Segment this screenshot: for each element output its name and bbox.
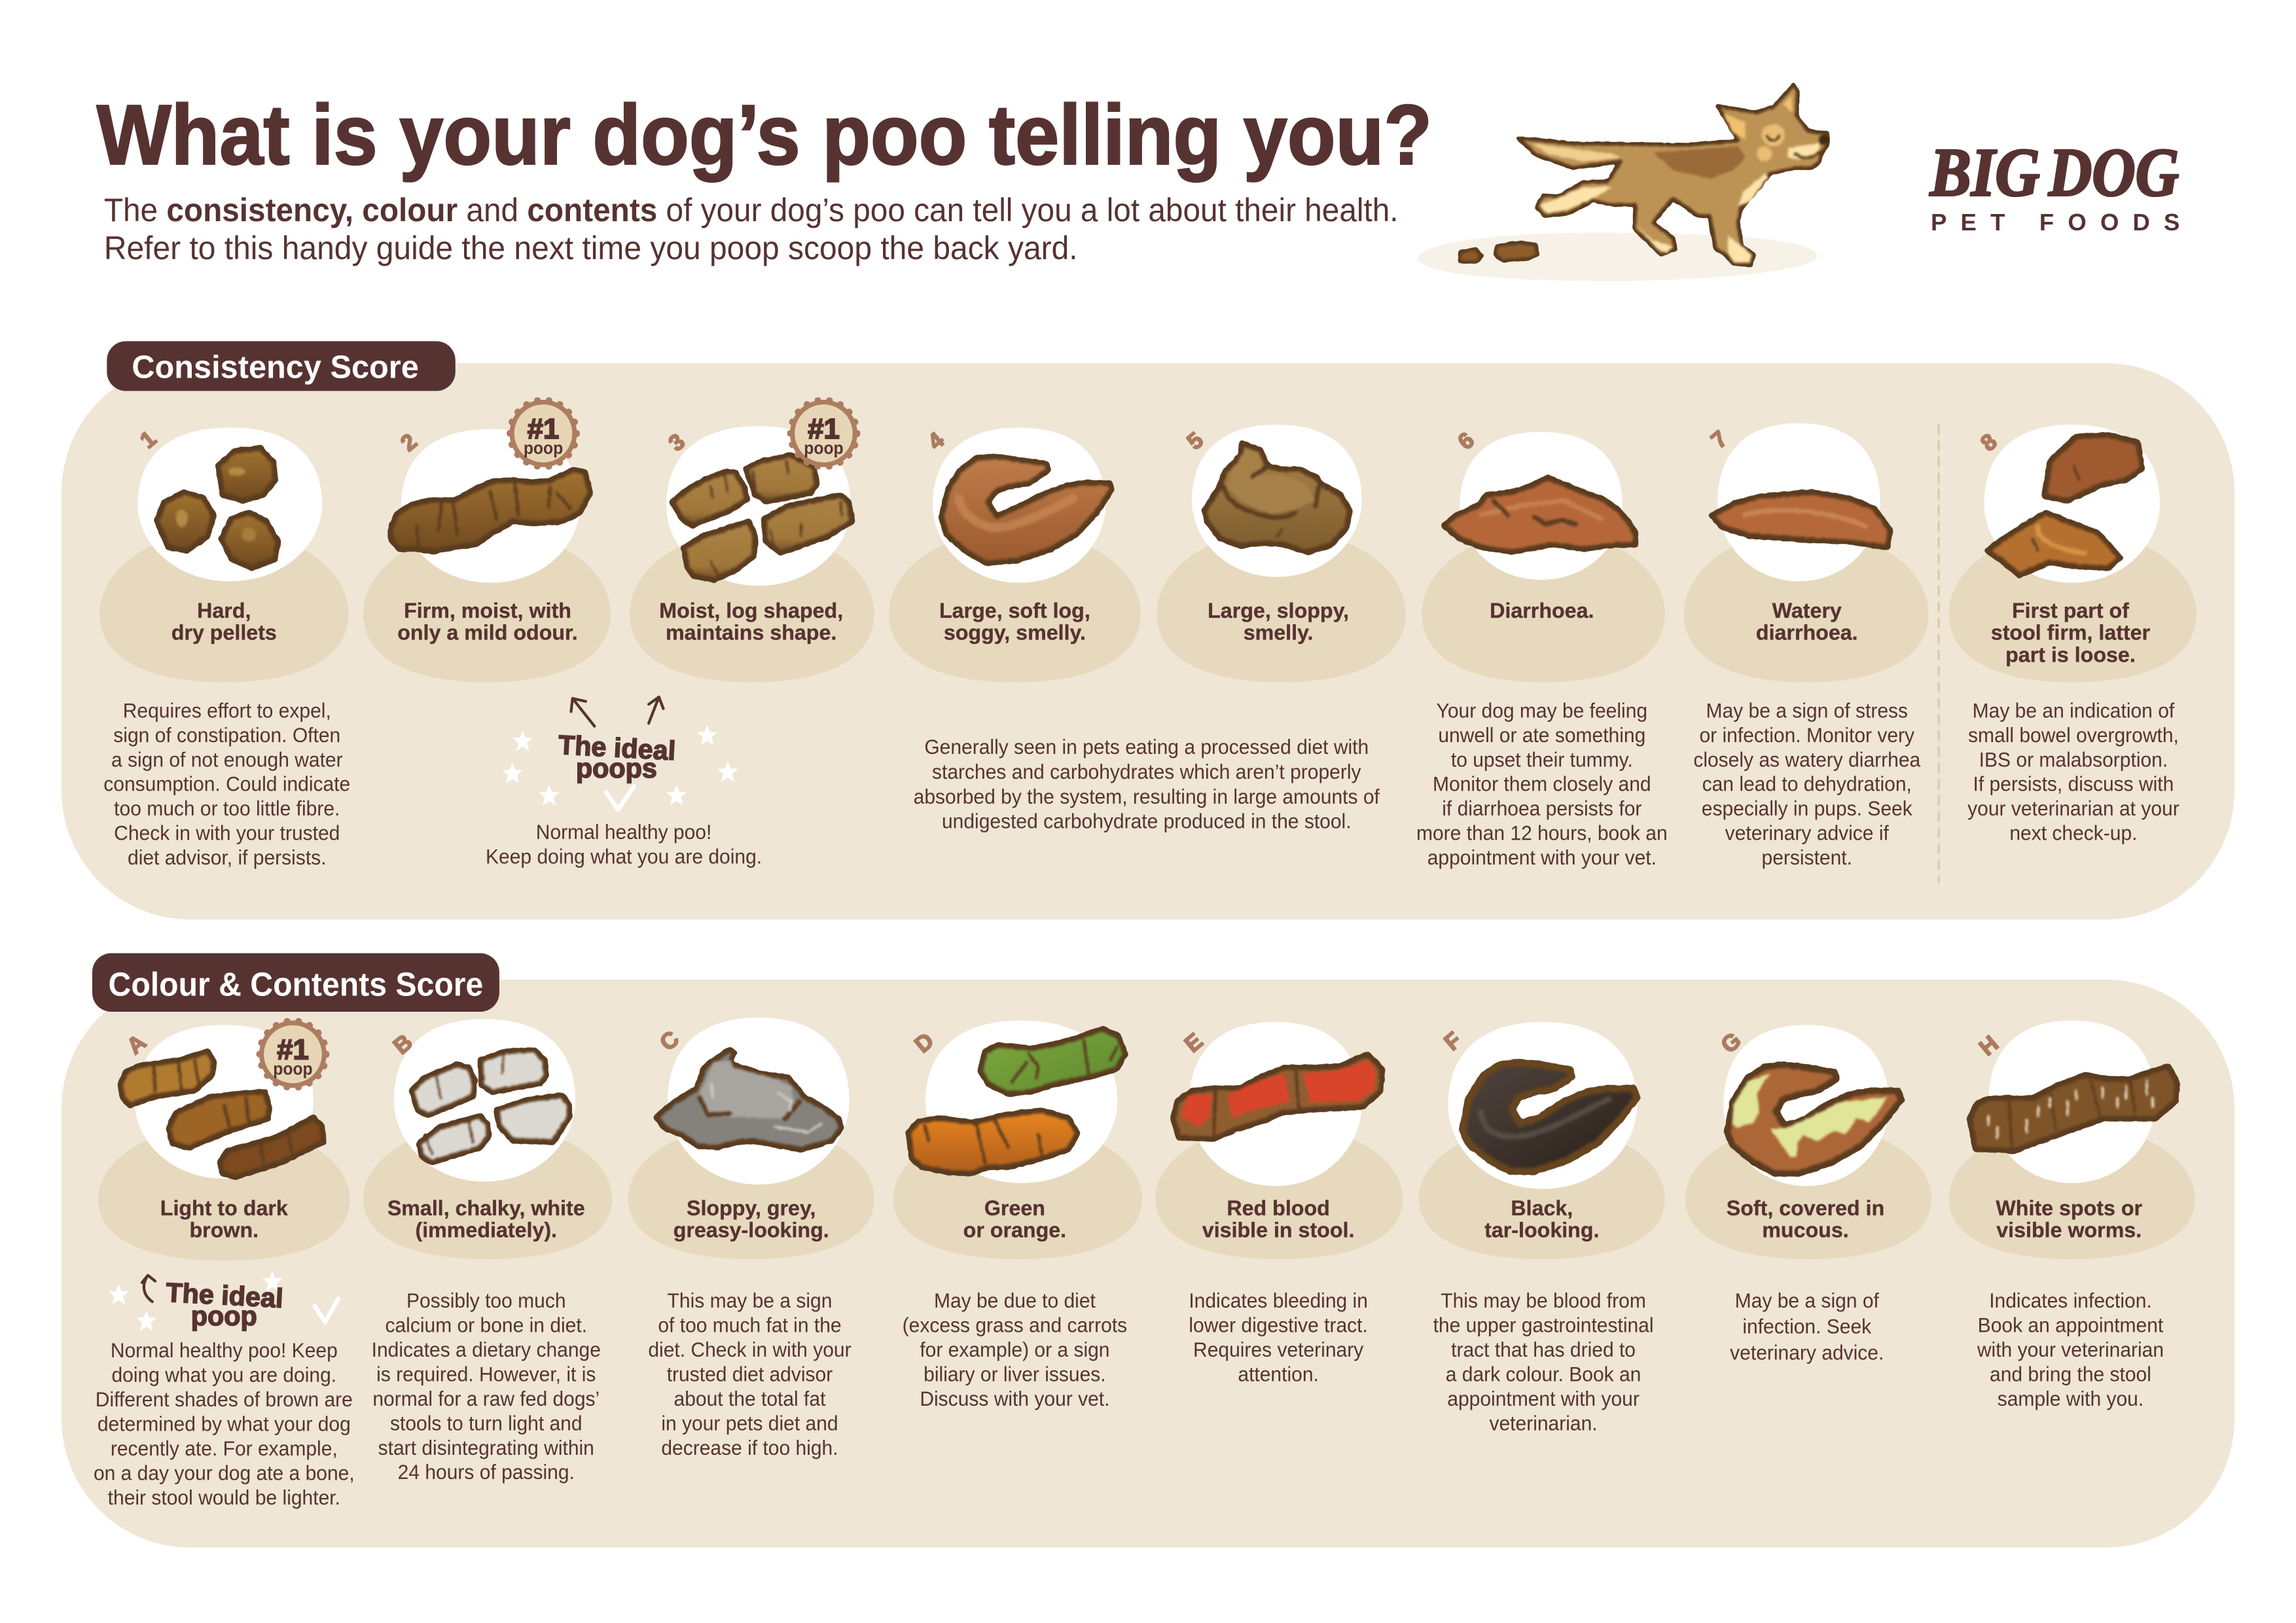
white circle bbox=[668, 1018, 850, 1185]
callout: the ideal poop: poop bbox=[191, 1301, 257, 1331]
white circle bbox=[1988, 1020, 2155, 1183]
poop: soft log bbox=[941, 456, 1112, 563]
label: Moist, log shaped, bbox=[659, 599, 843, 622]
dog nose bbox=[1819, 135, 1829, 145]
description: and bring the stool bbox=[1990, 1363, 2151, 1386]
label: dry pellets bbox=[171, 621, 277, 645]
description: stools to turn light and bbox=[390, 1412, 583, 1435]
description: Normal healthy poo! Keep bbox=[111, 1338, 338, 1362]
label: part is loose. bbox=[2005, 643, 2136, 666]
description: normal for a raw fed dogs’ bbox=[372, 1387, 600, 1410]
panel: consistency score bbox=[62, 341, 2234, 919]
number: 1 bbox=[135, 426, 161, 454]
dog mouth bbox=[1795, 151, 1821, 158]
intro text: The consistency, colour and contents of your dog’s poo can tell you a lot about their health. bbox=[104, 192, 1399, 228]
white circle bbox=[1723, 1025, 1889, 1186]
label blob bbox=[363, 1124, 612, 1259]
white circle bbox=[1984, 425, 2160, 582]
number: 3 bbox=[664, 429, 690, 456]
label: visible in stool. bbox=[1202, 1219, 1354, 1242]
description: Possibly too much bbox=[406, 1289, 566, 1312]
dog droppings bbox=[1460, 242, 1537, 262]
badge: #1 poop: #1 bbox=[277, 1035, 309, 1066]
description: Requires effort to expel, bbox=[123, 699, 331, 722]
white circle bbox=[1192, 425, 1362, 577]
description: May be a sign of bbox=[1735, 1289, 1879, 1312]
label: or orange. bbox=[963, 1219, 1066, 1242]
white circle bbox=[394, 1019, 575, 1182]
card H bbox=[1949, 1020, 2195, 1410]
label blob bbox=[363, 530, 611, 683]
poop: green and orange bbox=[908, 1029, 1125, 1173]
callout description: Keep doing what you are doing. bbox=[486, 845, 762, 868]
label blob bbox=[99, 530, 348, 683]
description: your veterinarian at your bbox=[1967, 796, 2179, 820]
badge: #1 poop bbox=[259, 1020, 327, 1088]
white circle bbox=[1448, 1022, 1637, 1189]
number: 2 bbox=[396, 429, 422, 456]
heading: colour and contents score: Colour & Contents Score bbox=[109, 965, 483, 1003]
card F bbox=[1419, 1022, 1665, 1435]
description: biliary or liver issues. bbox=[924, 1363, 1106, 1386]
description: appointment with your bbox=[1447, 1387, 1640, 1410]
description: This may be blood from bbox=[1441, 1289, 1646, 1312]
ground shadow bbox=[1418, 233, 1817, 281]
poop: log pieces bbox=[672, 455, 852, 580]
badge: #1 poop: poop bbox=[524, 438, 563, 458]
label: Black, bbox=[1511, 1196, 1573, 1220]
stars bbox=[502, 724, 738, 806]
label blob bbox=[630, 530, 874, 683]
description: trusted diet advisor bbox=[667, 1363, 833, 1386]
description: small bowel overgrowth, bbox=[1968, 723, 2179, 747]
label: diarrhoea. bbox=[1756, 621, 1858, 645]
label: Green bbox=[984, 1196, 1045, 1220]
dog illustration bbox=[1418, 84, 1829, 281]
number: E bbox=[1180, 1029, 1208, 1058]
label: Red blood bbox=[1227, 1196, 1330, 1220]
description: decrease if too high. bbox=[661, 1436, 838, 1459]
description: Discuss with your vet. bbox=[920, 1387, 1109, 1410]
number: D bbox=[910, 1028, 939, 1058]
card 7 bbox=[1684, 423, 1928, 869]
callout: the ideal poops bbox=[486, 697, 762, 868]
description: determined by what your dog bbox=[98, 1412, 351, 1436]
stars bbox=[109, 1271, 283, 1331]
description: diet advisor, if persists. bbox=[128, 846, 327, 869]
label: Hard, bbox=[197, 599, 251, 622]
description: infection. Seek bbox=[1742, 1315, 1872, 1338]
number: B bbox=[389, 1029, 418, 1060]
number: C bbox=[655, 1026, 684, 1056]
label: tar-looking. bbox=[1484, 1219, 1599, 1242]
number: 7 bbox=[1707, 426, 1732, 454]
title: What is your dog’s poo telling you? bbox=[97, 88, 1432, 183]
description: veterinarian. bbox=[1489, 1412, 1598, 1435]
label: Soft, covered in bbox=[1727, 1196, 1884, 1220]
label blob bbox=[1419, 1124, 1665, 1259]
dog tail highlight bbox=[1533, 143, 1621, 162]
badge: #1 poop bbox=[510, 400, 577, 467]
label: brown. bbox=[190, 1219, 259, 1242]
callout: the ideal poop bbox=[109, 1271, 338, 1331]
description: sign of constipation. Often bbox=[113, 723, 340, 747]
dog figure bbox=[1518, 84, 1829, 265]
card G bbox=[1685, 1025, 1931, 1364]
description: Indicates bleeding in bbox=[1189, 1289, 1368, 1312]
description: consumption. Could indicate bbox=[103, 772, 350, 796]
intro text bbox=[104, 192, 1399, 266]
panel: colour and contents score bbox=[62, 954, 2234, 1548]
badge: #1 poop: poop bbox=[804, 438, 844, 458]
label blob bbox=[628, 1124, 874, 1259]
label blob bbox=[889, 530, 1141, 683]
logo: DOG bbox=[2048, 134, 2179, 211]
description: of too much fat in the bbox=[658, 1313, 842, 1337]
description: start disintegrating within bbox=[378, 1436, 594, 1459]
card A bbox=[94, 1020, 355, 1509]
white circle bbox=[401, 429, 580, 582]
check mark bbox=[315, 1298, 338, 1322]
label: stool firm, latter bbox=[1991, 621, 2151, 645]
dog body bbox=[1518, 84, 1828, 265]
description: recently ate. For example, bbox=[111, 1436, 338, 1460]
description: the upper gastrointestinal bbox=[1433, 1313, 1654, 1337]
white circle bbox=[1717, 423, 1880, 581]
card 4 bbox=[889, 427, 1141, 683]
label: White spots or bbox=[1996, 1196, 2143, 1220]
poop: grey greasy bbox=[656, 1049, 842, 1150]
description: cards 4 and 5: Generally seen in pets eating a processed diet with bbox=[924, 735, 1369, 758]
mucous left bbox=[1732, 1073, 1770, 1128]
description: May be a sign of stress bbox=[1706, 699, 1908, 722]
badge: #1 poop: #1 bbox=[808, 414, 840, 445]
description: or infection. Monitor very bbox=[1699, 723, 1915, 747]
description: if diarrhoea persists for bbox=[1442, 796, 1641, 820]
poop: black tar bbox=[1463, 1062, 1637, 1171]
description: next check-up. bbox=[2009, 821, 2138, 845]
description: cards 4 and 5: starches and carbohydrates which aren’t properly bbox=[932, 760, 1361, 783]
dashed divider bbox=[1938, 425, 1939, 883]
label: Watery bbox=[1772, 599, 1842, 622]
white circle bbox=[137, 427, 322, 581]
description: May be due to diet bbox=[934, 1289, 1096, 1312]
number: 5 bbox=[1183, 428, 1208, 455]
poop: red blood bbox=[1173, 1054, 1382, 1139]
label: Small, chalky, white bbox=[387, 1196, 585, 1220]
dog eye bbox=[1767, 135, 1779, 140]
card B bbox=[363, 1019, 612, 1484]
poop: white chalky bbox=[412, 1050, 569, 1162]
heading: colour and contents score bbox=[92, 954, 499, 1012]
description: calcium or bone in diet. bbox=[385, 1313, 587, 1337]
white circle bbox=[135, 1025, 314, 1179]
poop: white spots bbox=[1969, 1066, 2178, 1151]
heading: consistency score: Consistency Score bbox=[132, 349, 419, 385]
description: too much or too little fibre. bbox=[114, 796, 340, 820]
description: May be an indication of bbox=[1973, 699, 2175, 722]
arrow bbox=[142, 1275, 155, 1302]
card 2 bbox=[363, 400, 611, 683]
number: 6 bbox=[1454, 428, 1479, 455]
poop: firm log bbox=[390, 469, 590, 552]
label blob bbox=[1684, 530, 1928, 683]
number: G bbox=[1717, 1028, 1746, 1058]
white circle bbox=[925, 1020, 1117, 1183]
label: Diarrhoea. bbox=[1490, 599, 1594, 622]
description: on a day your dog ate a bone, bbox=[94, 1461, 355, 1485]
intro text: Refer to this handy guide the next time you poop scoop the back yard. bbox=[104, 230, 1078, 266]
description: cards 4 and 5: undigested carbohydrate produced in the stool. bbox=[942, 810, 1352, 833]
description: in your pets diet and bbox=[661, 1412, 838, 1435]
logo: BIG bbox=[1929, 134, 2039, 211]
description: a dark colour. Book an bbox=[1446, 1363, 1641, 1386]
number: F bbox=[1440, 1027, 1466, 1056]
card 6 bbox=[1416, 428, 1668, 869]
poop: sloppy swirl bbox=[1204, 444, 1350, 552]
badge: #1 poop bbox=[790, 400, 857, 467]
callout text: The ideal bbox=[165, 1277, 284, 1313]
description: veterinary advice if bbox=[1725, 821, 1889, 845]
arrows bbox=[571, 697, 663, 726]
description: unwell or ate something bbox=[1438, 723, 1645, 747]
poop: watery bbox=[1712, 492, 1890, 548]
label: visible worms. bbox=[1996, 1219, 2142, 1242]
description: Indicates a dietary change bbox=[372, 1338, 601, 1361]
white circle bbox=[1189, 1022, 1362, 1186]
dog eye patch bbox=[1761, 124, 1785, 147]
description: appointment with your vet. bbox=[1427, 846, 1657, 869]
label blob bbox=[1155, 1124, 1403, 1259]
label: Large, sloppy, bbox=[1208, 599, 1349, 622]
description: with your veterinarian bbox=[1977, 1338, 2164, 1361]
logo: PET FOODS bbox=[1931, 209, 2179, 236]
dog ears bbox=[1723, 113, 1746, 139]
label blob bbox=[1157, 530, 1406, 683]
label: Light to dark bbox=[160, 1196, 288, 1220]
description: about the total fat bbox=[674, 1387, 826, 1410]
card 8 bbox=[1949, 425, 2197, 845]
poop: covered in mucous bbox=[1727, 1065, 1901, 1173]
description: Indicates infection. bbox=[1989, 1289, 2152, 1312]
label: soggy, smelly. bbox=[944, 621, 1086, 645]
poop: firm then loose bbox=[1987, 435, 2142, 575]
description: (excess grass and carrots bbox=[903, 1313, 1127, 1337]
card C bbox=[628, 1018, 874, 1459]
description: diet. Check in with your bbox=[648, 1338, 852, 1361]
label: maintains shape. bbox=[666, 621, 836, 645]
description: for example) or a sign bbox=[920, 1338, 1110, 1361]
description: tract that has dried to bbox=[1451, 1338, 1636, 1361]
dog back patch bbox=[1653, 146, 1746, 179]
description: persistent. bbox=[1762, 846, 1852, 869]
description: more than 12 hours, book an bbox=[1416, 821, 1668, 845]
white circle bbox=[933, 427, 1105, 582]
description: Book an appointment bbox=[1978, 1313, 2164, 1337]
poop: pellets bbox=[156, 448, 278, 568]
description: Monitor them closely and bbox=[1433, 772, 1651, 796]
panel background bbox=[62, 363, 2234, 919]
card E bbox=[1155, 1022, 1403, 1386]
number: H bbox=[1975, 1031, 2003, 1061]
label blob bbox=[1949, 1124, 2195, 1259]
card 5 bbox=[1157, 425, 1406, 683]
label blob bbox=[1422, 530, 1665, 683]
logo bbox=[1929, 134, 2179, 236]
label: First part of bbox=[2012, 599, 2129, 622]
description: doing what you are doing. bbox=[111, 1363, 336, 1387]
description: is required. However, it is bbox=[376, 1363, 596, 1386]
description: IBS or malabsorption. bbox=[1979, 747, 2168, 771]
badge: #1 poop: poop bbox=[273, 1059, 313, 1079]
number: A bbox=[122, 1029, 151, 1060]
heading: consistency score bbox=[107, 341, 456, 391]
description: Check in with your trusted bbox=[114, 821, 340, 845]
label blob bbox=[1949, 530, 2197, 683]
description: a sign of not enough water bbox=[111, 747, 343, 771]
white circle bbox=[1460, 432, 1623, 580]
description: to upset their tummy. bbox=[1451, 747, 1633, 771]
label: mucous. bbox=[1762, 1219, 1849, 1242]
callout: the ideal poops: poops bbox=[576, 753, 657, 783]
poop: diarrhoea bbox=[1444, 477, 1636, 552]
check mark bbox=[606, 786, 634, 810]
label: Large, soft log, bbox=[939, 599, 1090, 622]
label: smelly. bbox=[1244, 621, 1314, 645]
callout description: Normal healthy poo! bbox=[536, 820, 711, 844]
badge: #1 poop: #1 bbox=[528, 414, 559, 445]
label blob bbox=[1685, 1124, 1931, 1259]
number: 8 bbox=[1976, 429, 2001, 456]
label: Sloppy, grey, bbox=[687, 1196, 816, 1220]
description: This may be a sign bbox=[668, 1289, 832, 1312]
description: If persists, discuss with bbox=[1973, 772, 2174, 796]
description: Different shades of brown are bbox=[96, 1387, 353, 1411]
label blob bbox=[98, 1124, 350, 1260]
description: veterinary advice. bbox=[1730, 1341, 1884, 1364]
card 3 bbox=[630, 400, 874, 683]
dog cheek bbox=[1757, 146, 1772, 162]
dog extended leg highlight bbox=[1539, 187, 1613, 214]
description: Your dog may be feeling bbox=[1437, 699, 1647, 722]
description: sample with you. bbox=[1998, 1387, 2144, 1410]
dog muzzle bbox=[1788, 143, 1820, 159]
description: especially in pups. Seek bbox=[1702, 796, 1912, 820]
description: closely as watery diarrhea bbox=[1693, 747, 1921, 771]
card 1 bbox=[99, 426, 350, 869]
poop: light to dark pieces bbox=[120, 1051, 323, 1177]
description: 24 hours of passing. bbox=[398, 1460, 575, 1484]
label blob bbox=[893, 1124, 1142, 1259]
number: 4 bbox=[924, 427, 949, 455]
panel background bbox=[62, 980, 2234, 1548]
label: greasy-looking. bbox=[673, 1219, 829, 1242]
label: Firm, moist, with bbox=[404, 599, 571, 622]
description: their stool would be lighter. bbox=[108, 1486, 340, 1509]
callout text: The ideal bbox=[558, 730, 676, 766]
label: (immediately). bbox=[415, 1219, 557, 1242]
description: attention. bbox=[1238, 1363, 1319, 1386]
label: only a mild odour. bbox=[397, 621, 578, 645]
mucous right bbox=[1770, 1097, 1888, 1157]
description: cards 4 and 5: absorbed by the system, resulting in large amounts of bbox=[914, 785, 1380, 808]
description: can lead to dehydration, bbox=[1702, 772, 1912, 796]
description: lower digestive tract. bbox=[1189, 1313, 1368, 1337]
dog legs highlight bbox=[1728, 236, 1752, 263]
description: Requires veterinary bbox=[1193, 1338, 1364, 1361]
white circle bbox=[666, 426, 851, 586]
card D bbox=[893, 1020, 1142, 1410]
